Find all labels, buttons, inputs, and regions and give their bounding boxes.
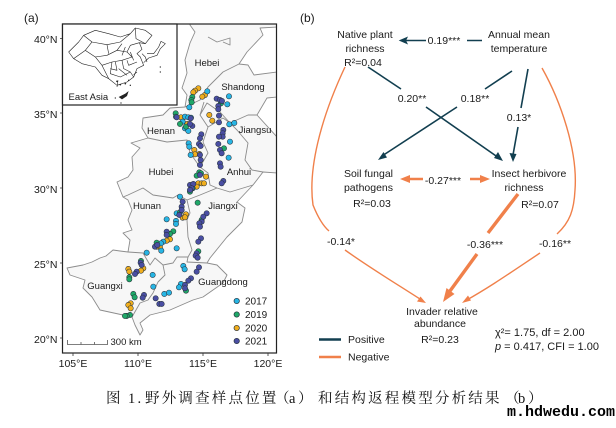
map frame <box>62 24 276 353</box>
node: invader relative abundance: Invader relative <box>406 306 478 318</box>
node: native plant richness: R²=0.04 <box>344 57 382 69</box>
node: annual mean temperature: Annual mean <box>488 29 550 41</box>
node: soil fungal pathogens: R²=0.03 <box>353 198 391 210</box>
arrow: soil pathogens and herbivores double arrow <box>400 175 490 187</box>
figure caption: a <box>289 391 298 407</box>
longitude axis labels: 110°E <box>124 358 152 370</box>
latitude axis labels: 20°N <box>34 334 57 346</box>
arrow: temperature to invader <box>462 68 575 303</box>
inset label: East Asia <box>68 92 109 103</box>
arrow: native plant to invader <box>312 67 426 303</box>
arrow: temperature to soil fungal pathogens <box>378 71 512 160</box>
sample sites 2019 (green) <box>122 94 227 319</box>
arrow: native plant to invader: -0.14* <box>327 236 355 248</box>
legend: survey years: 2019 <box>245 310 268 321</box>
sample sites 2020 (amber) <box>126 86 215 311</box>
province names <box>87 58 271 292</box>
scale bar <box>68 337 142 348</box>
node: insect herbivore richness: R²=0.07 <box>521 199 559 211</box>
legend: path sign: Negative <box>348 352 390 364</box>
legend: survey years: 2020 <box>245 324 268 334</box>
node: invader relative abundance: R²=0.23 <box>421 334 459 346</box>
longitude axis labels <box>59 353 282 370</box>
arrow: temperature to invader: -0.16** <box>539 238 571 250</box>
province names: Hunan <box>133 201 161 212</box>
inset map: East Asia <box>62 24 177 105</box>
latitude axis labels <box>34 34 62 346</box>
model fit statistics: χ²= 1.75, df = 2.00 <box>495 327 585 339</box>
province names: Anhui <box>227 167 251 178</box>
node: soil fungal pathogens: pathogens <box>344 182 393 194</box>
scale bar: 300 km <box>110 337 142 348</box>
figure caption: （ <box>505 390 522 407</box>
panel b label: (b) <box>300 11 315 25</box>
longitude axis labels: 115°E <box>189 358 217 370</box>
arrow: temperature to soil fungal pathogens: 0.18** <box>461 93 489 105</box>
sample sites 2017 (blue) <box>144 89 237 297</box>
province names: Henan <box>147 126 175 137</box>
model fit statistics <box>494 327 599 353</box>
model fit statistics: p = 0.417, CFI = 1.00 <box>494 341 599 353</box>
node: soil fungal pathogens: Soil fungal <box>344 168 393 180</box>
sample sites 2021 (indigo) <box>132 96 226 307</box>
watermark: m.hdwedu.com <box>507 404 615 421</box>
arrow: temperature to insect herbivore <box>507 69 531 162</box>
latitude axis labels: 40°N <box>34 34 57 46</box>
province names: Guangdong <box>198 277 248 288</box>
node: native plant richness: richness <box>345 43 385 55</box>
province names: Jiangxi <box>208 201 238 212</box>
inset outline <box>69 28 165 87</box>
legend: path sign <box>319 334 390 364</box>
latitude axis labels: 25°N <box>34 259 57 271</box>
node: insect herbivore richness <box>492 168 567 211</box>
node: invader relative abundance <box>406 306 478 346</box>
node: insect herbivore richness: Insect herbivore <box>492 168 567 180</box>
longitude axis labels: 105°E <box>59 358 87 370</box>
node: insect herbivore richness: richness <box>504 182 544 194</box>
province names: Hubei <box>149 167 173 178</box>
figure caption: 图 <box>106 390 123 407</box>
province names: Jiangsu <box>239 125 271 136</box>
arrow: native plant to insect herbivore: 0.20** <box>398 93 426 105</box>
figure caption: 和结构返程模型分析结果 <box>318 389 502 407</box>
figure caption: b <box>518 391 527 407</box>
arrow: temperature to native plant <box>400 35 482 47</box>
node: soil fungal pathogens <box>344 168 393 210</box>
legend: path sign: Positive <box>348 334 385 346</box>
arrow: native plant to insect herbivore <box>368 67 503 161</box>
panel: province map <box>67 24 277 335</box>
arrow: temperature to native plant: 0.19*** <box>428 35 460 47</box>
arrow: soil pathogens and herbivores double arrow: -0.27*** <box>425 175 461 187</box>
figure caption: 1. <box>128 391 143 407</box>
legend: survey years: 2021 <box>245 336 268 348</box>
arrow: temperature to insect herbivore: 0.13* <box>507 112 531 124</box>
node: annual mean temperature <box>488 29 550 55</box>
arrow: insect herbivore to invader <box>443 194 518 302</box>
figure caption: （ <box>275 390 292 407</box>
legend: survey years: 2017 <box>245 296 268 308</box>
longitude axis labels: 120°E <box>254 358 282 370</box>
map fill and borders <box>67 24 277 335</box>
latitude axis labels: 30°N <box>34 184 57 196</box>
inset islands <box>115 66 161 104</box>
province names: Guangxi <box>87 281 123 292</box>
province names: Hebei <box>195 58 219 69</box>
legend: survey years <box>234 296 268 348</box>
figure caption: 野外调查样点位置 <box>145 389 279 407</box>
node: native plant richness <box>337 29 393 69</box>
figure caption: ） <box>528 390 545 407</box>
node: native plant richness: Native plant <box>337 29 393 41</box>
node: annual mean temperature: temperature <box>491 43 547 55</box>
latitude axis labels: 35°N <box>34 109 57 121</box>
panel a label: (a) <box>24 11 39 25</box>
figure caption: ） <box>298 390 315 407</box>
province names: Shandong <box>221 82 265 93</box>
node: invader relative abundance: abundance <box>414 318 466 330</box>
arrow: insect herbivore to invader: -0.36*** <box>467 239 503 251</box>
